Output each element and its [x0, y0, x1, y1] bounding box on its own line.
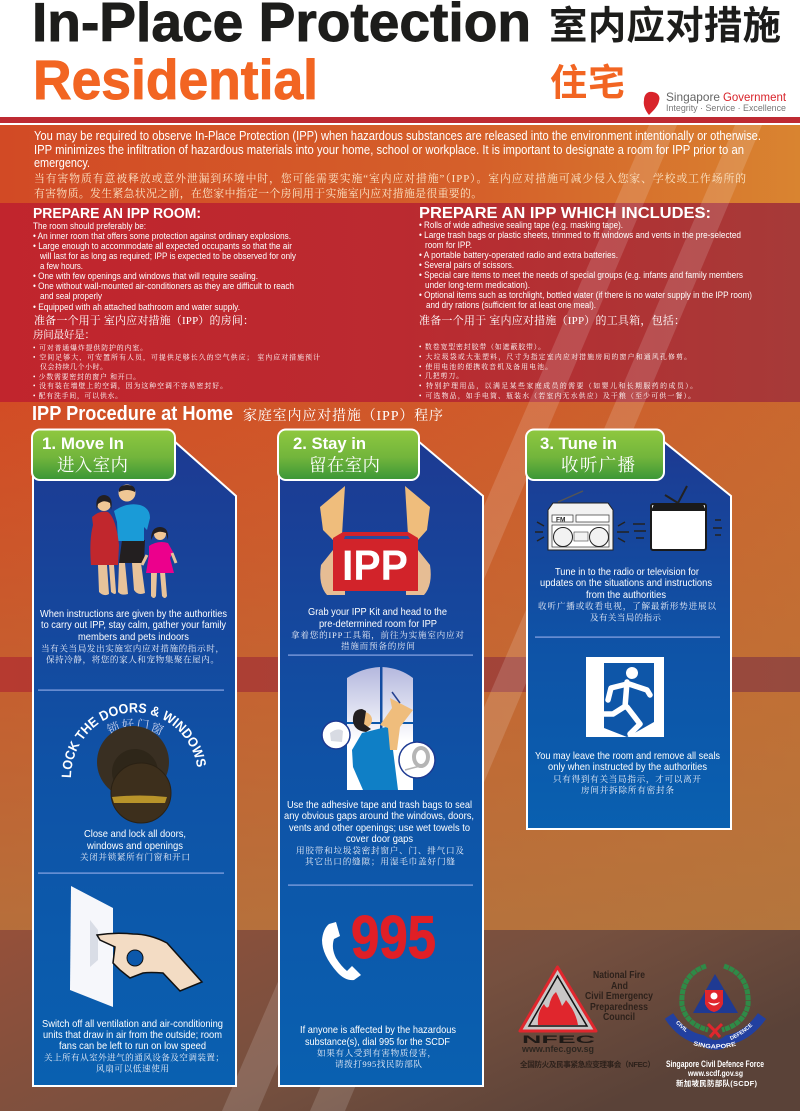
logo: nfec	[520, 967, 655, 1069]
text: gather family: 当有关当局发出实施室内应对措施的指示时，	[41, 642, 224, 654]
icon: civil defence emblem: CIVIL	[676, 1021, 686, 1032]
intro text: 当有害物质有意被释放或意外泄漏到环境中时，您可能需要实施“室内应对措施”（IPP）。室内应对措施可减少侵入您家、学校或工作场所的	[34, 171, 746, 185]
text: gather family: to carry out IPP, stay calm, gather your family	[41, 619, 227, 631]
chinese list: • 大垃圾袋或大张塑料，尺寸为指定室内应对措施房间的窗户和通风孔修剪。	[419, 352, 691, 362]
english list: • Rolls of wide adhesive sealing tape (e.g. masking tape).	[419, 220, 623, 231]
green tab	[526, 430, 664, 480]
council name: Civil Emergency	[585, 991, 653, 1002]
icon: television	[633, 486, 722, 550]
chinese list	[419, 342, 697, 401]
chinese subtitle: 住宅	[550, 62, 625, 104]
text: tune in	[538, 566, 716, 622]
intro text: 有害物质。发生紧急状况之前，在您家中指定一个房间用于实施室内应对措施是很重要的。	[34, 186, 482, 200]
heading: PREPARE AN IPP ROOM:	[33, 206, 201, 222]
icon: door knob with arc title	[62, 703, 206, 824]
chinese list: • 使用电池的便携收音机及备用电池。	[419, 362, 552, 371]
english list: • One without wall-mounted air-conditioners as they are difficult to reach	[33, 281, 294, 292]
english list: a few hours.	[40, 261, 83, 272]
singapore government logo: Singapore	[666, 90, 720, 104]
text: dial 995	[300, 1024, 456, 1069]
text: tune in: 收听广播或收看电视，了解最新形势进展以	[538, 600, 716, 612]
green tab	[32, 430, 175, 480]
text: lock doors: Close and lock all doors,	[84, 828, 186, 840]
chinese title: 室内应对措施	[549, 5, 781, 48]
council name	[585, 970, 653, 1023]
logo: nfec: NFEC	[522, 1034, 595, 1046]
panel: step 2 stay in	[278, 430, 483, 1086]
green tab: 留在室内	[309, 455, 380, 475]
icon: family	[90, 484, 176, 598]
heading: PREPARE AN IPP WHICH INCLUDES:	[419, 205, 711, 222]
chinese list: • 少数需要密封的窗户 和开口。	[33, 372, 140, 381]
chinese heading	[33, 313, 254, 341]
english list: • Special care items to meet the needs of special groups (e.g. infants and family members	[419, 270, 743, 281]
english list: • Optional items such as torchlight, bottled water (if there is no water supply in the IPP room)	[419, 290, 752, 301]
council name: National Fire	[593, 970, 645, 981]
heading: ipp procedure at home: IPP Procedure at Home	[32, 403, 233, 425]
icon: phone and 995	[322, 904, 436, 980]
icon: ipp kit: IPP	[342, 542, 408, 590]
council name: Preparedness	[590, 1002, 648, 1013]
green tab: 2. Stay in	[293, 434, 366, 453]
icon: civil defence emblem: DEFENCE	[730, 1023, 752, 1040]
singapore government logo: Government	[723, 90, 787, 104]
english list: • Large enough to accommodate all expected occupants so that the air	[33, 241, 293, 252]
icon: flame triangle	[520, 967, 596, 1031]
council name: And	[611, 981, 628, 992]
text: lock doors: 关闭并锁紧所有门窗和开口	[80, 851, 190, 862]
english list: • A portable battery-operated radio and extra batteries.	[419, 250, 618, 261]
icon: ipp kit	[320, 486, 431, 595]
text: seal gaps: cover door gaps	[346, 833, 413, 845]
icon: radio: FM	[556, 516, 565, 524]
panel: prepare an ipp room	[33, 206, 320, 401]
text: seal gaps	[284, 799, 474, 866]
chinese list: • 可对普通爆炸提供防护的内室。	[33, 343, 147, 352]
english list: will last for as long as required; IPP is expected to be observed for only	[39, 251, 296, 262]
logo: scdf: Singapore Civil Defence Force	[666, 1059, 764, 1069]
logo: nfec: www.nfec.gov.sg	[521, 1044, 594, 1055]
english list: • An inner room that offers some protection against ordinary explosions.	[33, 231, 291, 242]
panel: prepare an ipp which includes	[419, 205, 752, 401]
english list: • Large trash bags or plastic sheets, trimmed to fit windows and vents in the pre-selected	[419, 230, 741, 241]
text: gather family: 保持冷静，将您的家人和宠物集聚在屋内。	[46, 654, 219, 666]
chinese heading: 房间最好是：	[33, 328, 95, 341]
heading: ipp procedure at home	[32, 403, 443, 425]
icon: civil defence emblem: SINGAPORE	[694, 1042, 736, 1048]
english list: The room should preferably be:	[33, 221, 146, 232]
heading: ipp procedure at home: 家庭室内应对措施（IPP）程序	[243, 407, 443, 424]
intro text: emergency.	[34, 156, 90, 170]
english list	[419, 220, 752, 311]
chinese list: • 配有洗手间，可以供水。	[33, 391, 122, 401]
text: leave room: only when instructed by the authorities	[548, 761, 707, 773]
text: leave room: You may leave the room and remove all seals	[535, 750, 720, 762]
logo: scdf	[664, 964, 766, 1088]
english list: and dry rations (sufficient for at least one meal).	[426, 300, 596, 311]
title	[32, 0, 781, 111]
green tab	[278, 430, 419, 480]
text: grab kit: pre-determined room for IPP	[319, 618, 437, 630]
icon: man sealing window	[322, 667, 435, 790]
text: leave room	[535, 750, 720, 795]
text: gather family: When instructions are given by the authorities	[40, 608, 227, 620]
english list: • Several pairs of scissors.	[419, 260, 514, 271]
chinese list: • 数卷宽型密封胶带（如遮蔽胶带）。	[419, 342, 545, 351]
council name: Council	[603, 1012, 635, 1023]
text: lock doors: windows and openings	[86, 840, 183, 852]
panel background	[279, 441, 483, 1086]
text: seal gaps: any obvious gaps around the windows, doors,	[284, 810, 474, 822]
subtitle residential: Residential	[33, 48, 318, 111]
green tab: 3. Tune in	[540, 434, 617, 453]
text: grab kit: Grab your IPP Kit and head to the	[308, 606, 447, 618]
text: switch off	[42, 1018, 224, 1074]
chinese list	[33, 343, 320, 401]
text: seal gaps: Use the adhesive tape and trash bags to seal	[287, 799, 472, 811]
chinese heading: 准备一个用于 室内应对措施（IPP）的房间：	[34, 313, 254, 327]
intro text: IPP minimizes the infiltration of hazardous materials into your home, school or workplace. It is important to designate a room for IPP prior to an	[34, 143, 744, 157]
english list: • One with few openings and windows that will require sealing.	[33, 271, 258, 282]
text: seal gaps: 其它出口的缝隙；用湿毛巾盖好门缝	[305, 856, 455, 866]
text: leave room: 房间并拆除所有密封条	[581, 784, 674, 795]
text: tune in: updates on the situations and instructions	[540, 577, 712, 589]
text: grab kit	[291, 606, 464, 651]
panel: step 1 move in	[31, 428, 237, 1087]
chinese list: • 没有装在墙壁上的空调，因为这种空调不容易密封好。	[33, 381, 227, 391]
text: dial 995: 如果有人受到有害物质侵害，	[317, 1047, 436, 1059]
english list: room for IPP.	[425, 240, 472, 251]
text: gather family: members and pets indoors	[78, 631, 189, 643]
text: grab kit: 措施而预备的房间	[341, 640, 415, 651]
chinese list: • 可选物品，如手电筒、瓶装水（若室内无水供应）及干粮（至少可供一餐）。	[419, 391, 695, 401]
text: tune in: from the authorities	[586, 589, 666, 601]
chinese list: • 几把剪刀。	[419, 371, 463, 380]
green tab: 进入室内	[57, 455, 128, 475]
text: switch off: fans can be left to run on low speed	[59, 1040, 206, 1052]
intro text	[34, 129, 761, 200]
icon: phone and 995: 995	[351, 904, 436, 971]
english list: under long-term medication).	[425, 280, 530, 291]
text: tune in: 及有关当局的指示	[590, 612, 661, 622]
icon: door knob with arc title: 锁好门窗	[107, 718, 164, 736]
english list: • Equipped with ah attached bathroom and water supply.	[33, 302, 240, 313]
english list: and seal properly	[40, 291, 102, 302]
text: switch off: Switch off all ventilation and air-conditioning	[42, 1018, 223, 1030]
panel: step 3 tune in	[526, 430, 731, 829]
chinese list: • 空间足够大，可安置所有人员，可提供足够长久的空气供应； 室内应对措施预计	[33, 352, 320, 362]
text: grab kit: 拿着您的IPP工具箱，前往为实施室内应对	[291, 629, 464, 641]
text: dial 995: substance(s), dial 995 for the SCDF	[305, 1036, 450, 1048]
text: tune in: Tune in to the radio or television for	[555, 566, 699, 578]
text: seal gaps: vents and other openings; use wet towels to	[289, 822, 470, 834]
text: seal gaps: 用胶带和垃圾袋密封窗户、门、排气口及	[296, 844, 464, 856]
text: switch off: 风扇可以低速使用	[96, 1062, 169, 1074]
logo: scdf: 新加坡民防部队(SCDF)	[676, 1078, 758, 1088]
singapore government logo	[644, 90, 787, 115]
icon: radio	[535, 491, 629, 550]
text: leave room: 只有得到有关当局指示，才可以离开	[553, 773, 701, 785]
text: gather family	[40, 608, 227, 666]
text: switch off: units that draw in air from the outside; room	[43, 1029, 222, 1041]
icon: civil defence emblem	[664, 964, 766, 1050]
icon: exit sign	[586, 657, 664, 737]
icon: hand on light switch	[70, 886, 202, 1007]
green tab: 收听广播	[561, 455, 635, 475]
logo: nfec: 全国防火及民事紧急应变理事会（NFEC）	[520, 1059, 655, 1069]
panel background	[33, 441, 236, 1086]
chinese heading: 准备一个用于 室内应对措施（IPP）的工具箱，包括：	[419, 313, 685, 327]
english list	[33, 221, 296, 313]
text: switch off: 关上所有从室外进气的通风设备及空调装置；	[44, 1052, 224, 1062]
chinese list: • 特别护理用品，以满足某些家庭成员的需要（如婴儿和长期服药的成员）。	[419, 381, 697, 391]
icon: lion head	[644, 92, 660, 115]
text: dial 995: 请拨打995找民防部队	[335, 1058, 422, 1069]
text: dial 995: If anyone is affected by the hazardous	[300, 1024, 456, 1036]
text: lock doors	[80, 828, 190, 862]
chinese list: 仅会持续几个小时。	[40, 362, 107, 371]
logo: scdf: www.scdf.gov.sg	[687, 1069, 743, 1078]
green tab: 1. Move In	[42, 434, 124, 453]
panel background	[527, 441, 731, 829]
singapore government logo: Integrity · Service · Excellence	[666, 103, 786, 113]
icon: door knob with arc title: LOCK THE DOORS & WINDOWS	[62, 703, 206, 778]
